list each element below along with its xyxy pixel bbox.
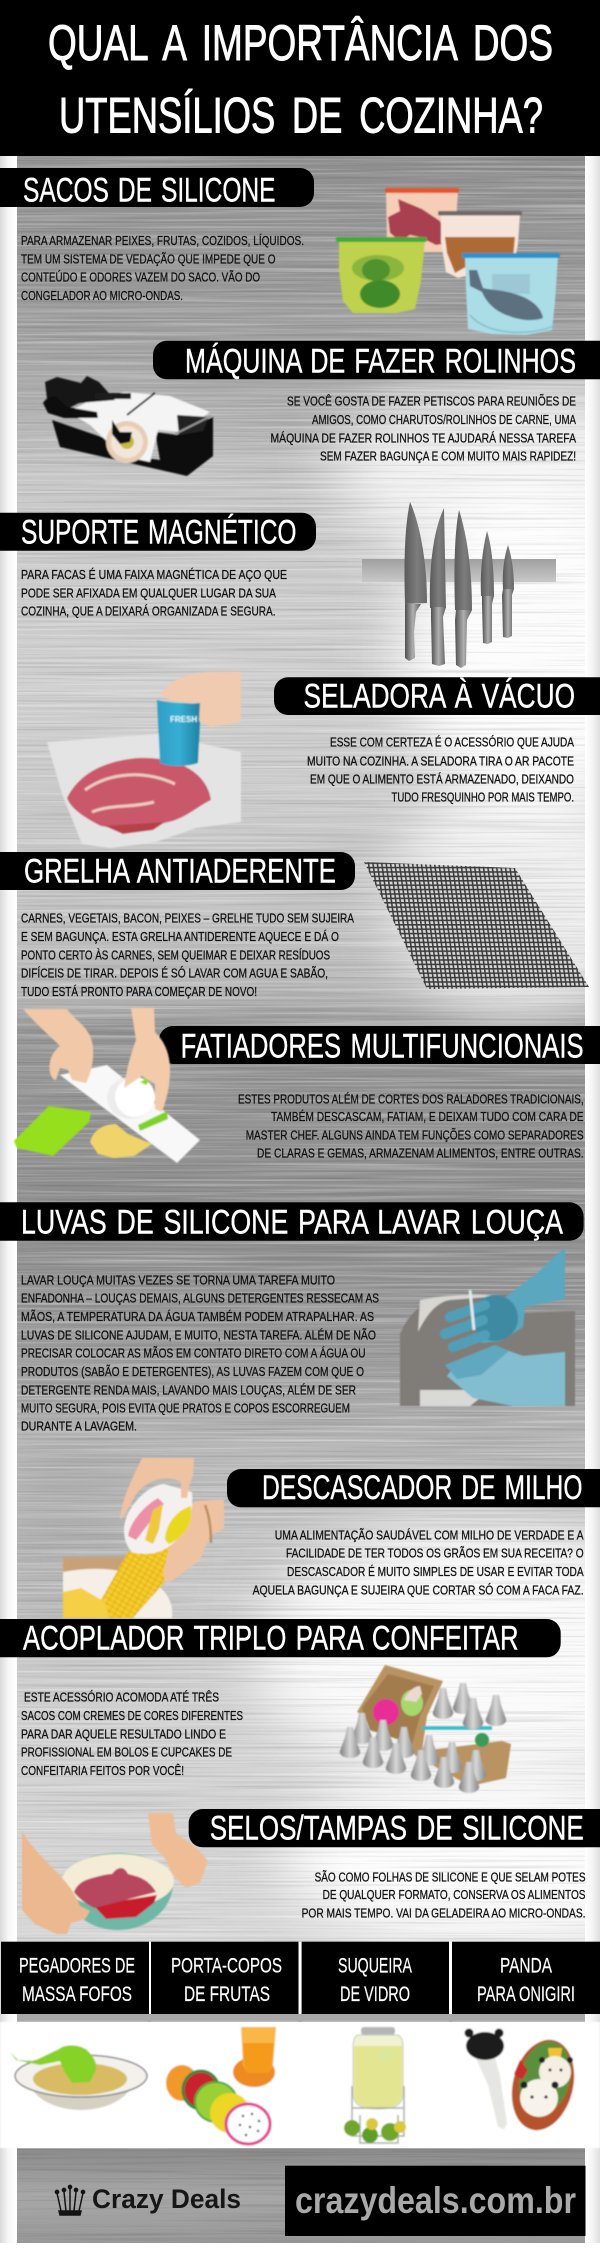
image: silicone bags [336, 188, 560, 335]
heading: suporte: SUPORTE MAGNÉTICO [21, 513, 296, 551]
text block: acoplador: PROFISSIONAL EM BOLOS E CUPCAKES DE [21, 1746, 232, 1760]
text block: luvas: LAVAR LOUÇA MUITAS VEZES SE TORNA UMA TAREFA MUITO [21, 1273, 335, 1287]
text block: sacos [21, 233, 304, 303]
text block: luvas [21, 1273, 379, 1434]
label: suqueira: DE VIDRO [340, 1983, 410, 2006]
text block: luvas: MUITO SEGURA, POIS EVITA QUE PRATOS E COPOS ESCORREGUEM [21, 1402, 350, 1416]
label: porta-copos [151, 1942, 298, 2014]
text block: luvas: LUVAS DE SILICONE AJUDAM, E MUITO, NESTA TAREFA. ALÉM DE NÃO [21, 1327, 376, 1342]
footer [17, 2148, 586, 2243]
label: panda [452, 1942, 600, 2014]
panel: descascador de milho [63, 1458, 600, 1618]
text block: acoplador [21, 1690, 243, 1778]
panel: luvas de silicone [0, 1202, 584, 1434]
text block: sacos: CONGELADOR AO MICRO-ONDAS. [21, 289, 183, 303]
panel: seladora à vácuo [47, 672, 600, 848]
heading: sacos de silicone: SACOS DE SILICONE [23, 172, 276, 210]
brand name: Crazy Deals [92, 2184, 241, 2214]
text block: luvas: PRODUTOS (SABÃO E DETERGENTES), AS LUVAS FAZEM COM QUE O [21, 1365, 364, 1379]
brushed metal background panel [0, 156, 600, 1950]
text block: sacos: CONTEÚDO E ODORES VAZEM DO SACO. VÃO DO [21, 270, 260, 285]
image: vacuum sealer with meat: FRESH [170, 715, 197, 724]
text block: grelha: TUDO ESTÁ PRONTO PARA COMEÇAR DE NOVO! [21, 984, 257, 999]
title [0, 0, 600, 156]
image: roller machine [43, 376, 213, 476]
text block: grelha: DIFÍCEIS DE TIRAR. DEPOIS É SÓ LAVAR COM AGUA E SABÃO, [21, 966, 328, 981]
text block: suporte [21, 567, 287, 619]
left metallic margin [0, 156, 17, 2243]
text block: acoplador: ESTE ACESSÓRIO ACOMODA ATÉ TRÊS [24, 1690, 219, 1705]
label: porta-copos: PORTA-COPOS [171, 1955, 282, 1978]
text block: sacos: PARA ARMAZENAR PEIXES, FRUTAS, COZIDOS, LÍQUIDOS. [21, 233, 304, 248]
text block: luvas: DURANTE A LAVAGEM. [21, 1420, 137, 1434]
text block: acoplador: PARA DAR AQUELE RESULTADO LINDO E [21, 1727, 226, 1741]
panel: extras grid [0, 1942, 600, 2148]
panel: máquina de fazer rolinhos [43, 341, 600, 476]
text block: luvas: ENFADONHA – LOUÇAS DEMAIS, ALGUNS DETERGENTES RESSECAM AS [21, 1292, 379, 1306]
text block: luvas: DETERGENTE RENDA MAIS, LAVANDO MAIS LOUÇAS, ALÉM DE SER [21, 1382, 356, 1397]
website box [285, 2166, 586, 2236]
label: suqueira [302, 1942, 449, 2014]
text block: sacos: TEM UM SISTEMA DE VEDAÇÃO QUE IMPEDE QUE O [21, 252, 276, 266]
panel: suporte magnético [0, 502, 556, 668]
label: pegadores [1, 1942, 149, 2014]
text block: selos [302, 1871, 586, 1920]
image: corn peeler [63, 1458, 224, 1618]
image: panda onigiri mould [452, 2022, 600, 2148]
image: multi-function slicer [14, 1008, 200, 1163]
image: piping nozzles set [340, 1665, 511, 1793]
label: pegadores: MASSA FOFOS [22, 1983, 132, 2006]
text block: máquina [270, 394, 577, 463]
text block: fatiadores [238, 1091, 584, 1161]
text block: descascador [253, 1527, 584, 1597]
text block: grelha [21, 912, 355, 999]
text block: suporte: PARA FACAS É UMA FAIXA MAGNÉTICA DE AÇO QUE [21, 567, 287, 582]
image: knives on magnetic rack [362, 502, 556, 668]
text block: luvas: MÃOS, A TEMPERATURA DA ÁGUA TAMBÉM PODEM ATRAPALHAR. AS [21, 1309, 374, 1324]
image: pasta server [0, 2022, 148, 2148]
metal strip behind labels [17, 2014, 585, 2022]
image: non-stick grill mesh [364, 862, 589, 989]
text block: acoplador: CONFEITARIA FEITOS POR VOCÊ! [21, 1763, 184, 1778]
image: vacuum sealer with meat [47, 672, 241, 848]
text block: grelha: PONTO CERTO ÀS CARNES, SEM QUEIMAR E DEIXAR RESÍDUOS [21, 947, 330, 962]
right metallic margin [585, 156, 600, 2243]
panel: acoplador triplo [0, 1619, 561, 1793]
text block: acoplador: SACOS COM CREMES DE CORES DIFERENTES [21, 1709, 243, 1723]
text block: grelha: E SEM BAGUNÇA. ESTA GRELHA ANTIDERENTE AQUECE E DÁ O [21, 929, 339, 944]
image: fruit coasters [151, 2022, 298, 2148]
image: silicone gloves in sink [400, 1247, 575, 1406]
text block: grelha: CARNES, VEGETAIS, BACON, PEIXES – GRELHE TUDO SEM SUJEIRA [21, 912, 355, 926]
text block: suporte: PODE SER AFIXADA EM QUALQUER LUGAR DA SUA [21, 586, 277, 600]
label: suqueira: SUQUEIRA [338, 1955, 412, 1978]
panel: grelha antiaderente [0, 852, 589, 999]
image: glass juice dispenser [302, 2022, 449, 2148]
icon: crown logo [55, 2185, 85, 2215]
label: porta-copos: DE FRUTAS [184, 1983, 270, 2006]
label: pegadores: PEGADORES DE [19, 1955, 135, 1978]
text block: luvas: PRECISAR COLOCAR AS MÃOS EM CONTATO DIRETO COM A ÁGUA OU [21, 1346, 366, 1361]
label: panda: PANDA [500, 1955, 552, 1978]
panel: selos/tampas [22, 1809, 600, 1934]
text block: seladora [307, 735, 575, 805]
panel: fatiadores multifuncionais [14, 1008, 600, 1163]
image: silicone lid on bowl [22, 1813, 208, 1934]
panel: sacos de silicone [0, 168, 560, 335]
heading: grelha: GRELHA ANTIADERENTE [24, 853, 336, 891]
text block: suporte: COZINHA, QUE A DEIXARÁ ORGANIZADA E SEGURA. [21, 604, 276, 619]
